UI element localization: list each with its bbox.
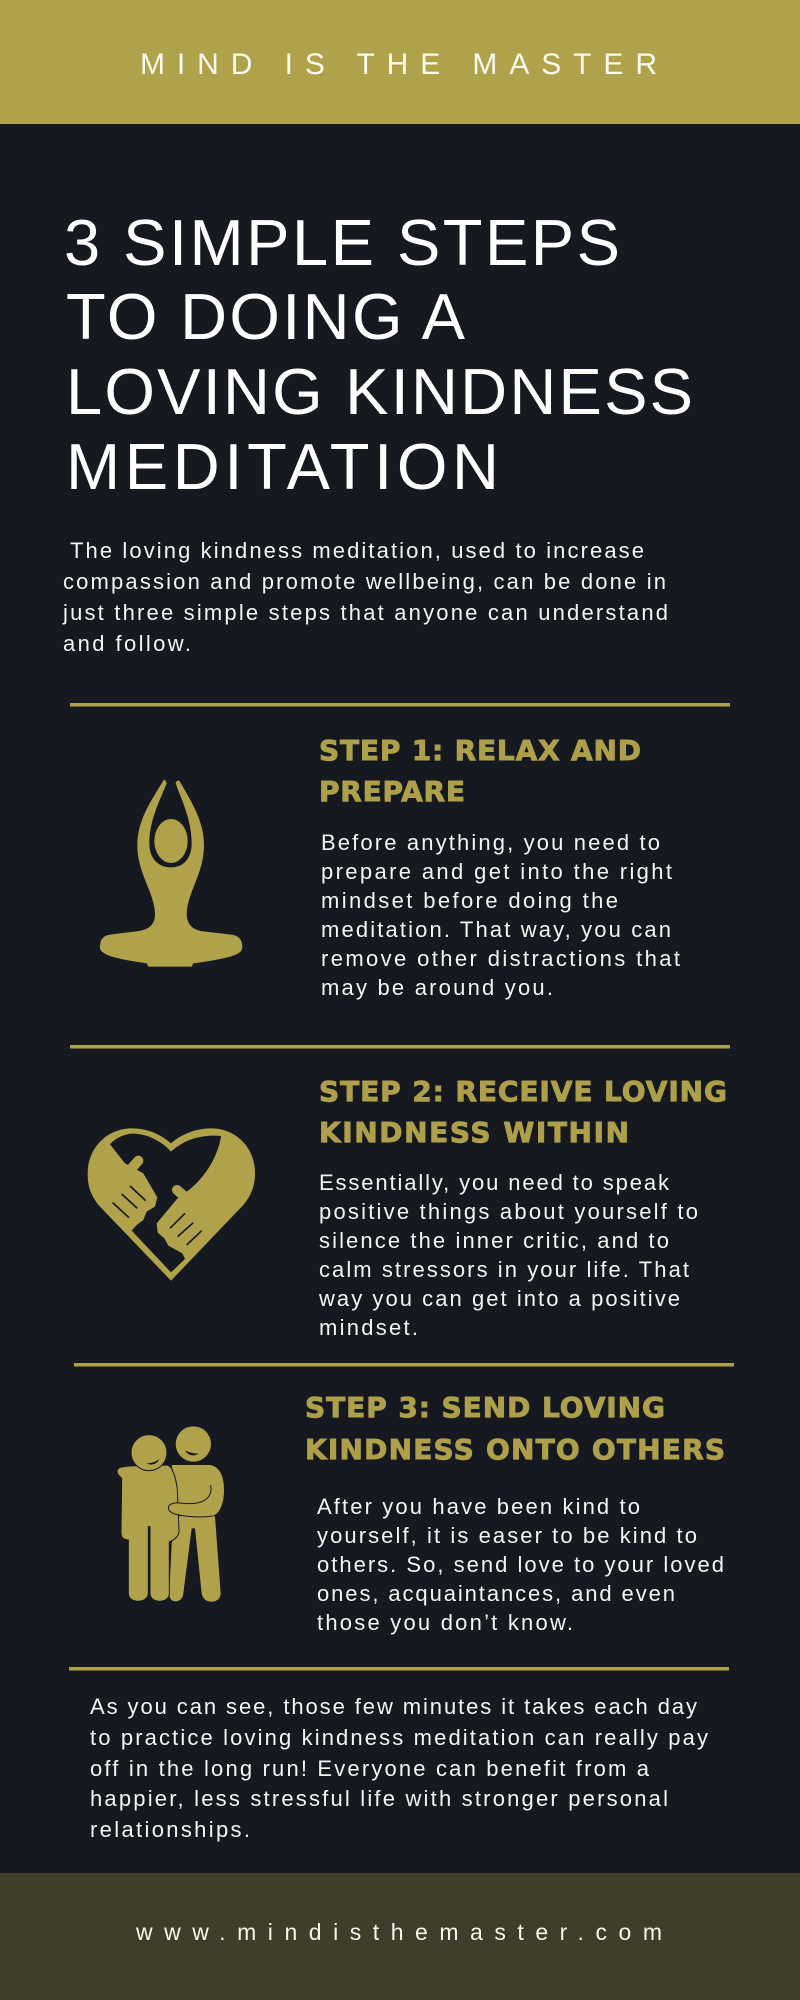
title: TO DOING A <box>66 280 466 353</box>
step 3 text: others. So, send love to your loved <box>317 1552 724 1577</box>
intro paragraph <box>62 538 668 656</box>
step 2 text: mindset. <box>319 1315 418 1340</box>
step 1 heading: PREPARE <box>319 775 465 808</box>
icon: meditating figure <box>100 780 242 967</box>
step 2 text: silence the inner critic, and to <box>319 1228 669 1253</box>
closing paragraph: relationships. <box>90 1817 250 1842</box>
step 3 text <box>317 1494 724 1635</box>
step 1 heading: STEP 1: RELAX AND <box>319 734 641 767</box>
step 3 heading <box>305 1391 725 1466</box>
step 3 text: After you have been kind to <box>317 1494 640 1519</box>
website url: www.mindisthemaster.com <box>135 1919 662 1945</box>
intro paragraph: and follow. <box>63 631 191 656</box>
step 3 text: those you don’t know. <box>317 1610 573 1635</box>
step 1 text: Before anything, you need to <box>321 830 660 855</box>
step 2 heading: KINDNESS WITHIN <box>319 1116 629 1149</box>
footer band <box>0 1873 800 2000</box>
intro paragraph: compassion and promote wellbeing, can be done in <box>63 569 666 594</box>
step 2 text: positive things about yourself to <box>319 1199 698 1224</box>
step 2 heading <box>319 1075 727 1149</box>
title: 3 SIMPLE STEPS <box>64 206 620 279</box>
step 3 text: ones, acquaintances, and even <box>317 1581 675 1606</box>
step 2 text: way you can get into a positive <box>318 1286 680 1311</box>
closing paragraph: off in the long run! Everyone can benefit from a <box>90 1756 650 1781</box>
step 1 text: may be around you. <box>321 975 553 1000</box>
intro paragraph: The loving kindness meditation, used to increase <box>70 538 644 563</box>
closing paragraph: As you can see, those few minutes it takes each day <box>90 1694 697 1719</box>
closing paragraph: to practice loving kindness meditation can really pay <box>90 1725 708 1750</box>
step 3 heading: KINDNESS ONTO OTHERS <box>305 1433 725 1466</box>
header band <box>0 0 800 124</box>
icon: two people embracing <box>117 1426 224 1602</box>
step 1 heading <box>319 734 641 808</box>
step 2 heading: STEP 2: RECEIVE LOVING <box>319 1075 727 1108</box>
title: LOVING KINDNESS <box>66 355 693 428</box>
title: MEDITATION <box>66 430 499 503</box>
step 2 text <box>318 1170 698 1340</box>
title <box>64 206 693 503</box>
panel: step 1 <box>100 734 680 1000</box>
step 1 text: meditation. That way, you can <box>321 917 671 942</box>
closing paragraph <box>90 1694 708 1842</box>
step 1 text <box>321 830 680 1000</box>
icon: heart with two hands <box>88 1128 255 1281</box>
step 1 text: prepare and get into the right <box>321 859 672 884</box>
step 1 text: mindset before doing the <box>321 888 618 913</box>
step 3 text: yourself, it is easer to be kind to <box>317 1523 697 1548</box>
panel: step 3 <box>117 1391 725 1635</box>
step 2 text: Essentially, you need to speak <box>319 1170 670 1195</box>
step 1 text: remove other distractions that <box>321 946 680 971</box>
intro paragraph: just three simple steps that anyone can understand <box>62 600 668 625</box>
panel: step 2 <box>88 1075 727 1340</box>
brand name: MIND IS THE MASTER <box>140 48 657 81</box>
closing paragraph: happier, less stressful life with stronger personal <box>90 1786 668 1811</box>
step 2 text: calm stressors in your life. That <box>319 1257 689 1282</box>
step 3 heading: STEP 3: SEND LOVING <box>305 1391 665 1424</box>
